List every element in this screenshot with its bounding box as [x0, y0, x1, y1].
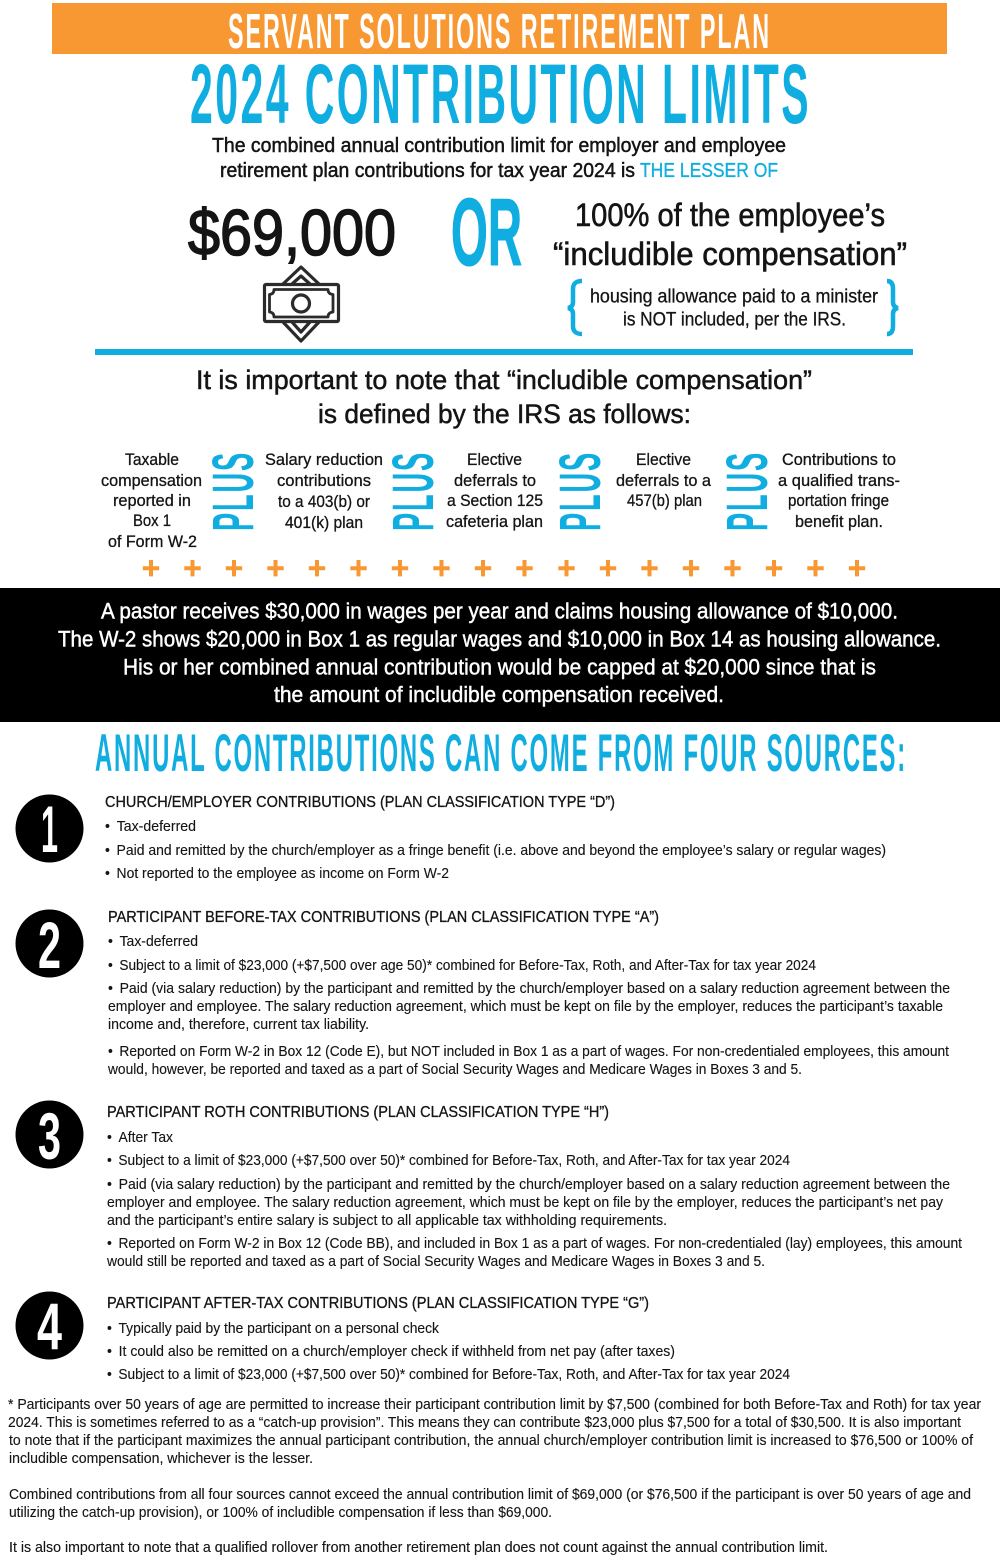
column: salary reduction	[265, 450, 383, 532]
source 2 badge	[16, 908, 84, 982]
source 2 text: would, however, be reported and taxed as a part of Social Security Wages and Medicare Wages in Boxes 3 and 5.	[107, 1062, 802, 1078]
source 2 text: PARTICIPANT BEFORE-TAX CONTRIBUTIONS (PLAN CLASSIFICATION TYPE “A”)	[108, 909, 659, 926]
source 4 text: • It could also be remitted on a church/employer check if withheld from net pay (after taxes)	[107, 1344, 675, 1360]
alternative limit text	[553, 197, 907, 272]
column: 457(b): deferrals to a	[616, 471, 712, 490]
footnotes: Combined contributions from all four sources cannot exceed the annual contribution limit of $69,000 (or $76,500 if the participant is over 50 years of age and	[9, 1487, 971, 1503]
column: taxable compensation: Box 1	[133, 511, 171, 530]
source 2 badge: 2	[38, 908, 61, 982]
black example panel	[0, 588, 1000, 722]
source 1 text: CHURCH/EMPLOYER CONTRIBUTIONS (PLAN CLASSIFICATION TYPE “D”)	[105, 794, 615, 811]
footnotes: * Participants over 50 years of age are permitted to increase their participant contribution limit by $7,500 (combined for both Before-Tax and Roth) for tax year	[8, 1397, 981, 1413]
source 1 text: • Tax-deferred	[105, 819, 196, 835]
source 3 text: would still be reported and taxed as a part of Social Security Wages and Medicare Wages in Boxes 3 and 5.	[106, 1254, 765, 1270]
text: PLUS	[715, 451, 780, 531]
column: taxable compensation: of Form W-2	[108, 532, 197, 551]
intro text: THE LESSER OF	[640, 160, 778, 182]
column: taxable compensation: Taxable	[125, 450, 179, 469]
source 4 text	[107, 1295, 790, 1383]
amount: $69,000: $69,000	[188, 196, 396, 269]
source 4 badge	[16, 1289, 84, 1363]
black example panel: A pastor receives $30,000 in wages per year and claims housing allowance of $10,000.	[101, 598, 898, 624]
column: section 125: cafeteria plan	[446, 512, 543, 531]
source 2 text	[107, 909, 950, 1078]
source 3 text: • Subject to a limit of $23,000 (+$7,500 over 50)* combined for Before-Tax, Roth, and After-Tax for tax year 2024	[107, 1153, 790, 1169]
footnotes: 2024. This is sometimes referred to as a “catch-up provision”. This means they can contribute $23,000 plus $7,500 for a total of $30,500. It is also important	[8, 1415, 961, 1431]
intro text: The combined annual contribution limit for employer and employee	[212, 135, 786, 157]
footnotes: includible compensation, whichever is the lesser.	[9, 1451, 313, 1467]
source 3 text: • After Tax	[107, 1130, 174, 1146]
column: section 125: deferrals to	[454, 471, 536, 490]
column: salary reduction: Salary reduction	[265, 450, 383, 469]
column: transportation fringe: benefit plan.	[795, 512, 883, 531]
source 2 text: • Reported on Form W-2 in Box 12 (Code E), but NOT included in Box 1 as a part of wages. For non-credentialed employees, this amount	[108, 1044, 949, 1060]
column: taxable compensation: reported in	[113, 491, 191, 510]
footnotes: utilizing the catch-up provision), or 100% of includible compensation if less than $69,000.	[9, 1505, 552, 1521]
source 2 text: • Subject to a limit of $23,000 (+$7,500 over age 50)* combined for Before-Tax, Roth, and After-Tax for tax year 2024	[108, 958, 816, 974]
black example panel: the amount of includible compensation received.	[274, 682, 724, 707]
column: transportation fringe: portation fringe	[788, 491, 889, 510]
source 2 text: income and, therefore, current tax liability.	[108, 1017, 369, 1033]
column: taxable compensation: compensation	[101, 471, 202, 490]
text: OR	[451, 179, 522, 286]
footnotes: It is also important to note that a qualified rollover from another retirement plan does not count against the annual contribution limit.	[9, 1540, 828, 1556]
column: salary reduction: contributions	[277, 471, 371, 490]
source 1 text	[105, 794, 886, 882]
text: PLUS	[381, 451, 446, 531]
text: PLUS	[201, 451, 266, 531]
column: transportation fringe: a qualified trans-	[778, 471, 900, 490]
source 4 text: PARTICIPANT AFTER-TAX CONTRIBUTIONS (PLAN CLASSIFICATION TYPE “G”)	[107, 1295, 649, 1312]
housing allowance note in braces: housing allowance paid to a minister	[590, 286, 879, 308]
column: 457(b)	[616, 450, 712, 510]
definition heading: It is important to note that “includible compensation”	[196, 365, 812, 395]
column: transportation fringe	[778, 450, 900, 531]
intro text: retirement plan contributions for tax year 2024 is	[220, 160, 635, 182]
source 3 text: • Paid (via salary reduction) by the participant and remitted by the church/employer based on a salary reduction agreement between the	[107, 1177, 950, 1193]
column: transportation fringe: Contributions to	[782, 450, 896, 469]
housing allowance note in braces	[568, 281, 898, 334]
footnotes	[8, 1397, 981, 1556]
source 1 badge	[16, 792, 84, 866]
column: 457(b): 457(b) plan	[627, 491, 702, 510]
housing allowance note in braces: is NOT included, per the IRS.	[623, 310, 846, 330]
source 3 badge: 3	[38, 1099, 61, 1173]
alternative limit text: 100% of the employee’s	[575, 197, 885, 233]
source 3 text: and the participant’s entire salary is subject to all applicable tax withholding requirements.	[107, 1213, 667, 1229]
source 4 badge: 4	[37, 1289, 62, 1363]
source 1 text: • Not reported to the employee as income on Form W-2	[105, 866, 449, 882]
column: section 125: a Section 125	[447, 491, 543, 510]
source 2 text: • Paid (via salary reduction) by the participant and remitted by the church/employer based on a salary reduction agreement between the	[108, 981, 950, 997]
source 1 badge: 1	[41, 792, 58, 866]
source 3 text	[106, 1104, 962, 1270]
black example panel: The W-2 shows $20,000 in Box 1 as regular wages and $10,000 in Box 14 as housing allowance.	[58, 626, 941, 652]
source 2 text: • Tax-deferred	[108, 934, 198, 950]
alternative limit text: “includible compensation”	[553, 236, 907, 272]
definition heading	[196, 365, 812, 429]
source 1 text: • Paid and remitted by the church/employer as a fringe benefit (i.e. above and beyond the employee’s salary or regular wages)	[105, 843, 886, 859]
source 3 text: • Reported on Form W-2 in Box 12 (Code BB), and included in Box 1 as a part of wages. For non-credentialed (lay) employees, this amount	[107, 1236, 962, 1252]
source 2 text: employer and employee. The salary reduction agreement, which must be kept on file by the employer, reduces the participant’s taxable	[108, 999, 943, 1015]
icon: money bill	[264, 267, 338, 341]
row of orange plus signs	[143, 560, 865, 576]
intro text	[212, 135, 786, 182]
column: section 125	[446, 450, 543, 531]
source 4 text: • Typically paid by the participant on a personal check	[107, 1321, 440, 1337]
source 3 text: PARTICIPANT ROTH CONTRIBUTIONS (PLAN CLASSIFICATION TYPE “H”)	[107, 1104, 609, 1121]
black example panel: His or her combined annual contribution would be capped at $20,000 since that is	[123, 654, 876, 680]
footnotes: to note that if the participant maximizes the annual participant contribution, the annual church/employer contribution limit is increased to $76,500 or 100% of	[9, 1433, 974, 1449]
source 4 text: • Subject to a limit of $23,000 (+$7,500 over 50)* combined for Before-Tax, Roth, and After-Tax for tax year 2024	[107, 1367, 790, 1383]
source 3 text: employer and employee. The salary reduction agreement, which must be kept on file by the employer, reduces the participant’s net pay	[107, 1195, 944, 1211]
column: section 125: Elective	[467, 450, 522, 469]
source 3 badge	[16, 1099, 84, 1173]
definition heading: is defined by the IRS as follows:	[318, 399, 691, 429]
column: salary reduction: to a 403(b) or	[278, 492, 370, 511]
column: salary reduction: 401(k) plan	[285, 513, 363, 532]
column: taxable compensation	[101, 450, 202, 551]
column: 457(b): Elective	[636, 450, 691, 469]
text: PLUS	[548, 451, 613, 531]
